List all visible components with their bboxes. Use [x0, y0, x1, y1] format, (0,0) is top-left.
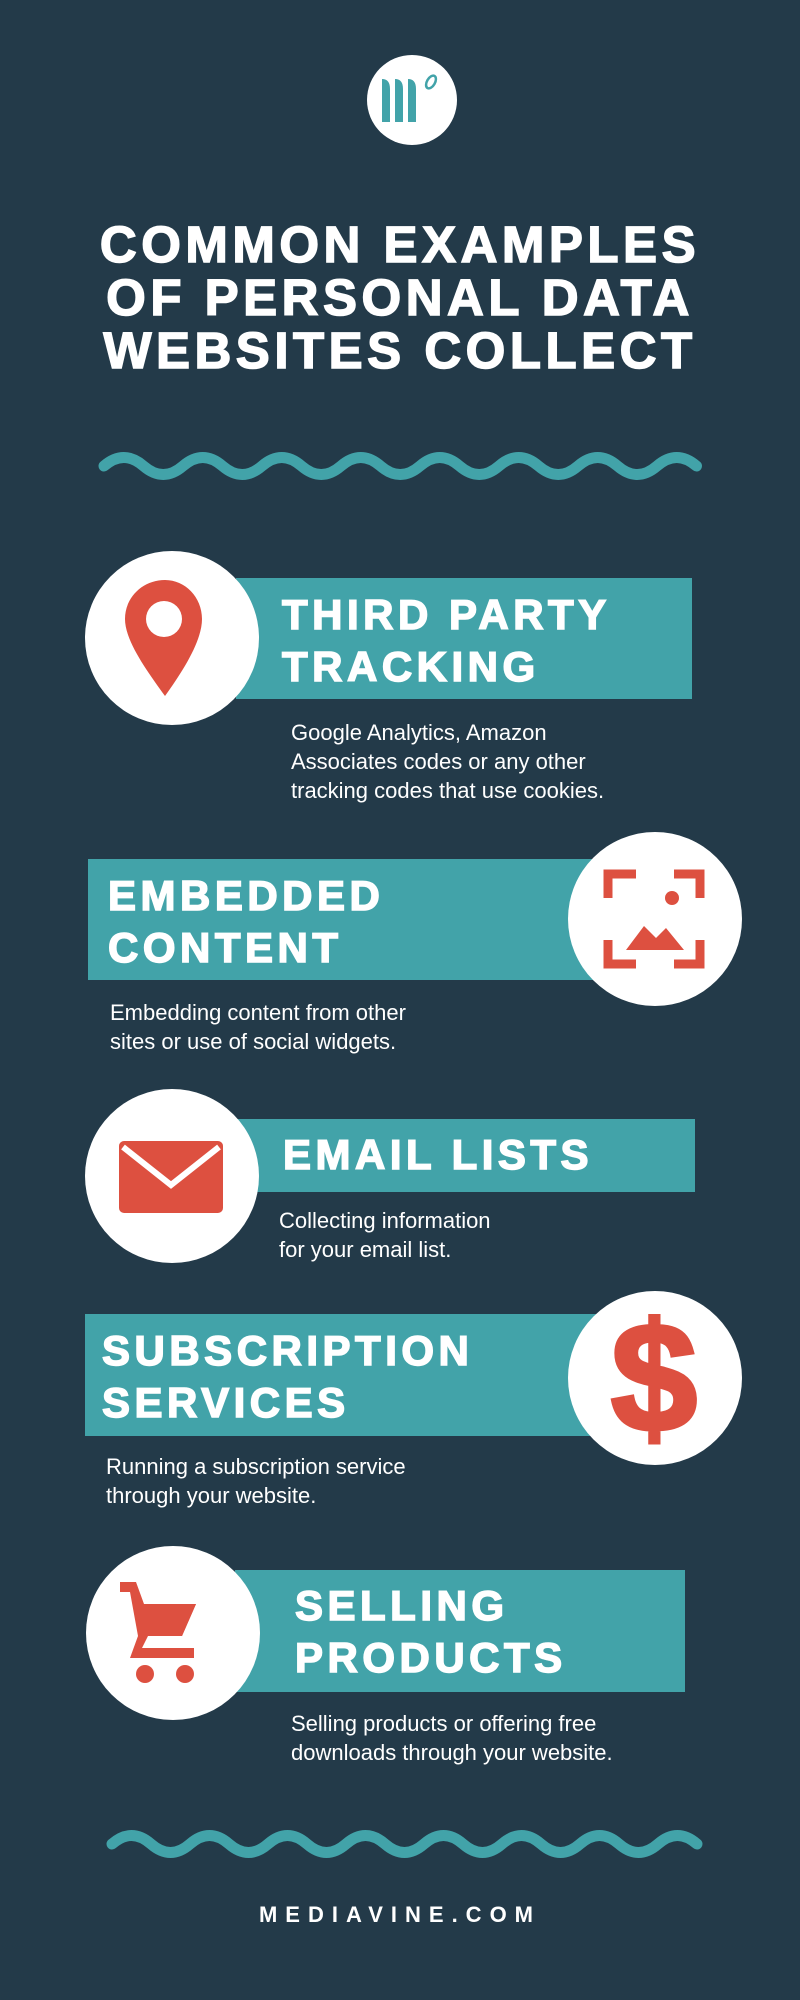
text: subscription description: through your website.: [106, 1483, 316, 1508]
text: email description: [279, 1208, 491, 1262]
icon: envelope: [85, 1089, 259, 1263]
panel: third party tracking: [85, 551, 692, 803]
panel: email lists: [85, 1089, 695, 1263]
heading: subscription services: SUBSCRIPTION: [102, 1327, 473, 1374]
icon: dollar sign: $: [611, 1291, 697, 1464]
bar: subscription: [85, 1314, 597, 1436]
heading: embedded content: CONTENT: [108, 924, 342, 971]
heading: email lists: EMAIL LISTS: [283, 1131, 593, 1178]
text: third party description: Associates codes or any other: [291, 749, 586, 774]
text: embedded description: [110, 1000, 406, 1054]
heading: subscription services: [102, 1327, 473, 1426]
title: OF PERSONAL DATA: [106, 269, 694, 326]
panel: selling products: [86, 1546, 685, 1765]
heading: embedded content: [108, 872, 384, 971]
panel: embedded content: [88, 832, 742, 1054]
icon: shopping cart: [86, 1546, 260, 1720]
bar: third party: [236, 578, 692, 699]
wave divider top: [98, 452, 702, 480]
icon: location pin: [85, 551, 259, 725]
text: third party description: tracking codes that use cookies.: [291, 778, 604, 803]
heading: third party tracking: THIRD PARTY: [282, 591, 611, 638]
text: third party description: Google Analytics, Amazon: [291, 720, 547, 745]
text: subscription description: [106, 1454, 406, 1508]
text: selling description: Selling products or offering free: [291, 1711, 596, 1736]
heading: third party tracking: TRACKING: [282, 643, 540, 690]
text: third party description: [291, 720, 604, 803]
text: email description: for your email list.: [279, 1237, 451, 1262]
heading: subscription services: SERVICES: [102, 1379, 350, 1426]
heading: selling products: SELLING: [295, 1582, 509, 1629]
wave divider bottom: [106, 1830, 702, 1858]
text: embedded description: Embedding content from other: [110, 1000, 406, 1025]
text: selling description: [291, 1711, 613, 1765]
text: email description: Collecting information: [279, 1208, 491, 1233]
heading: embedded content: EMBEDDED: [108, 872, 384, 919]
icon: image frame: [568, 832, 742, 1006]
footer: MEDIAVINE.COM: [259, 1902, 541, 1927]
text: selling description: downloads through your website.: [291, 1740, 613, 1765]
heading: third party tracking: [282, 591, 611, 690]
title: [100, 216, 700, 379]
heading: selling products: [295, 1582, 567, 1681]
title: COMMON EXAMPLES: [100, 216, 700, 273]
panel: subscription services: [85, 1291, 742, 1508]
bar: selling: [235, 1570, 685, 1692]
text: subscription description: Running a subscription service: [106, 1454, 406, 1479]
logo: [367, 55, 457, 145]
bar: embedded: [88, 859, 597, 980]
icon: dollar sign: [568, 1291, 742, 1465]
title: WEBSITES COLLECT: [103, 322, 697, 379]
heading: selling products: PRODUCTS: [295, 1634, 567, 1681]
bar: email: [236, 1119, 695, 1192]
text: embedded description: sites or use of social widgets.: [110, 1029, 396, 1054]
